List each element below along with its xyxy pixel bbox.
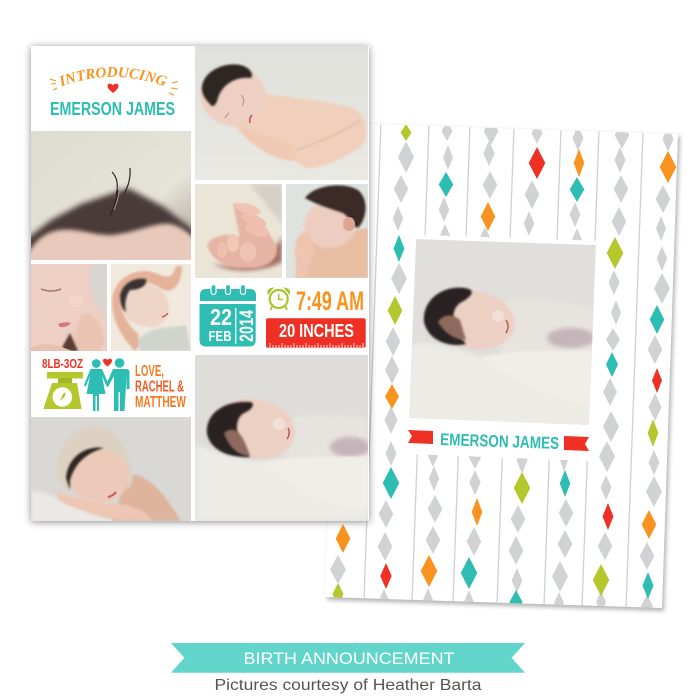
orange diamonds [336, 149, 676, 587]
photo: baby feet [195, 184, 282, 278]
ribbon: name on back card [408, 430, 589, 453]
teal diamonds [383, 172, 664, 614]
name: EMERSON JAMES [50, 99, 175, 119]
photo: swaddled newborn on back card [405, 239, 600, 430]
photo: baby cradled in hands [111, 264, 191, 351]
parents names [135, 363, 186, 411]
photo: swaddled newborn [195, 355, 370, 521]
icon: small heart [103, 359, 112, 366]
time: 7:49 AM [296, 286, 364, 316]
photo: sleeping newborn curled [194, 46, 368, 180]
weight label: 8LB-3OZ [42, 356, 83, 371]
parents names: RACHEL & [135, 378, 184, 396]
weight, couple and names strip [42, 356, 186, 411]
icon: calendar date: 2014 [237, 310, 258, 342]
panel: white frame around back photo [410, 235, 604, 461]
icon: baby scale [43, 372, 83, 409]
caption: photo credit: Pictures courtesy of Heather Barta [214, 677, 482, 694]
heading block: introducing [50, 67, 178, 119]
olive diamonds [332, 124, 658, 605]
length ruler [266, 318, 366, 348]
panel: back card shadow [327, 125, 680, 611]
panel: front card [26, 42, 374, 528]
gray diamonds [330, 117, 674, 617]
parents names: MATTHEW [135, 394, 186, 411]
icon: calendar date: FEB [208, 328, 232, 345]
arched script word: INTRODUCING [60, 67, 168, 86]
photo: baby in knit bonnet [31, 417, 191, 525]
banner: birth announcement: BIRTH ANNOUNCEMENT [244, 650, 454, 668]
icon: alarm clock [268, 288, 290, 310]
icon: left red flag [408, 430, 433, 444]
icon: heart [108, 84, 118, 93]
decorative rays [50, 79, 178, 95]
icon: calendar date [200, 284, 258, 346]
length ruler: 20 INCHES [279, 321, 354, 341]
photo: baby hair close-up [31, 131, 191, 260]
red diamonds [380, 147, 662, 589]
photo: baby profile with hand [286, 184, 368, 278]
icon: couple holding hands [84, 358, 130, 411]
date, time and length strip [200, 284, 366, 348]
icon: right red flag [564, 436, 589, 451]
icon: calendar date: 22 [210, 304, 232, 330]
parents names: LOVE, [135, 363, 164, 380]
photo: baby face close-up [31, 264, 107, 351]
name text: EMERSON JAMES [440, 430, 559, 453]
panel: back card with diamond pattern [325, 117, 678, 617]
banner: birth announcement [171, 643, 525, 673]
